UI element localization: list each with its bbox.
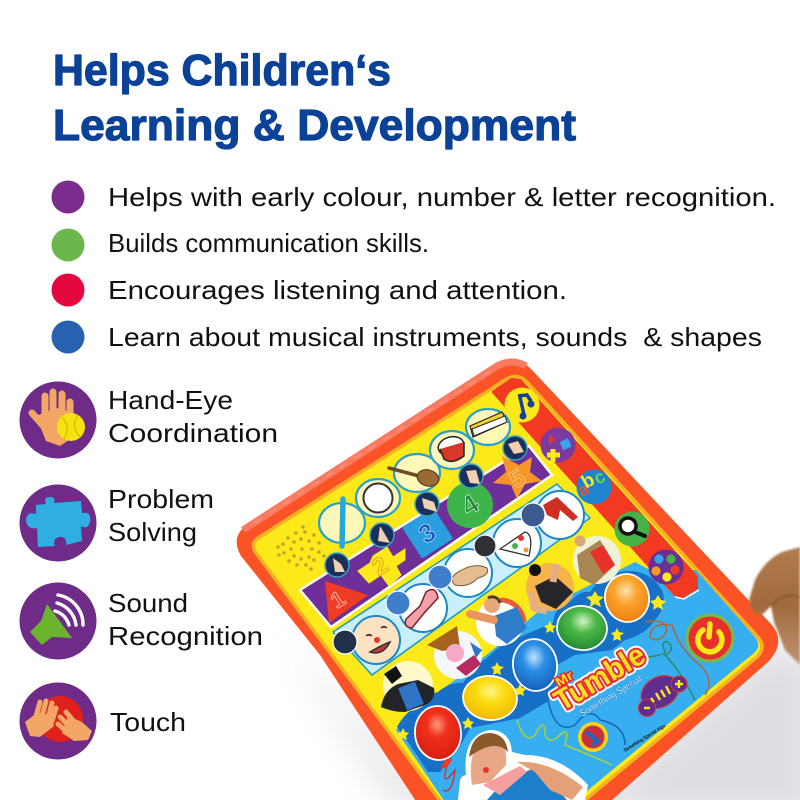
button: music — [504, 388, 540, 422]
product: sound tablet — [237, 361, 800, 800]
instrument: tambourine — [356, 479, 400, 517]
label: hand-eye coordination: Hand-Eye — [108, 385, 233, 415]
shape: plus 2: 2 — [367, 551, 393, 581]
button: colours — [648, 550, 684, 584]
volume control — [635, 669, 687, 716]
icon: hands on red circle — [20, 682, 96, 760]
logo: Mr Tumble Something Special: Something Special — [578, 673, 644, 720]
character: pirate — [526, 563, 574, 611]
label: touch: Touch — [110, 707, 186, 737]
hand button 1 — [325, 553, 349, 577]
character circles — [381, 536, 621, 712]
skill: sound recognition — [20, 582, 263, 660]
dark blue cloud — [397, 571, 664, 772]
hand button 3 — [415, 492, 439, 516]
shape: circle 4 — [447, 482, 493, 528]
word: palette — [493, 519, 541, 567]
bullet list — [52, 180, 776, 354]
bullet: listening: Encourages listening and attention. — [108, 275, 567, 305]
red button strip — [494, 380, 699, 599]
button: numbers — [540, 428, 576, 462]
shape: square 3 — [402, 508, 453, 559]
instrument: guitar — [389, 454, 441, 492]
instrument circles — [319, 409, 510, 546]
balloon: yellow — [461, 674, 519, 722]
bullet: instruments: Learn about musical instruments, sounds & shapes — [108, 322, 762, 352]
icon: speaker — [20, 582, 96, 660]
balloon: orange — [601, 571, 653, 625]
balloons — [413, 571, 653, 769]
word: hand — [444, 549, 492, 597]
character: clown in shirt — [470, 597, 527, 646]
button: letters: a — [574, 479, 593, 500]
logo: Mr Tumble Something Special: Tumble — [549, 638, 651, 718]
hand holding tablet — [749, 547, 800, 665]
skill: problem solving — [20, 484, 214, 562]
balloon: blue — [510, 636, 560, 694]
shape: square 3: 3 — [413, 516, 441, 550]
word: dice — [536, 491, 584, 539]
purple shapes strip — [300, 446, 552, 627]
presenter photo — [458, 730, 588, 800]
character: fairy — [427, 626, 482, 679]
shape: star 5: 5 — [504, 463, 531, 494]
tablet casing — [237, 361, 778, 800]
hand buttons — [325, 436, 527, 577]
hand button 5 — [503, 436, 527, 460]
button: letters: b — [578, 469, 599, 493]
button: letters: c — [590, 466, 609, 488]
balloon: green — [554, 603, 610, 653]
logo: Mr Tumble Something Special: Tumble — [549, 638, 651, 718]
shape: triangle 1 — [325, 581, 368, 623]
title: Helps Children‘s — [53, 46, 391, 95]
instrument: drum — [430, 431, 474, 469]
balloon panel — [396, 562, 758, 800]
skill: touch — [20, 682, 186, 760]
balloon strings — [443, 621, 709, 791]
button: letters — [574, 466, 612, 504]
button: question magnifier — [614, 512, 650, 546]
word: face — [352, 616, 400, 664]
apple sticker — [578, 722, 608, 752]
bullet: communication: Builds communication skills. — [108, 228, 429, 258]
balloon: red — [413, 704, 463, 769]
label: problem solving: Problem — [108, 484, 214, 514]
logo: Mr Tumble Something Special: Mr — [553, 668, 576, 690]
label: hand-eye coordination: Coordination — [108, 418, 278, 448]
shape: triangle 1: 1 — [326, 586, 350, 613]
label: problem solving: Solving — [108, 517, 197, 547]
light blue word strip — [333, 484, 590, 675]
instrument: keyboard — [466, 409, 510, 445]
icon: hand and ball — [20, 382, 96, 458]
icon: puzzle piece — [20, 484, 96, 562]
title: Learning & Development — [53, 101, 576, 150]
word: bow tie — [399, 584, 447, 632]
title — [53, 46, 576, 150]
bullet: colour recognition: Helps with early colour, number & letter recognition. — [108, 182, 776, 212]
small print: Something Special logo — [623, 723, 667, 754]
label: sound recognition: Recognition — [108, 621, 263, 651]
instrument: recorder — [319, 499, 365, 546]
character: red coat — [573, 536, 621, 585]
shape: circle 4: 4 — [456, 488, 484, 522]
balloon stars — [397, 591, 666, 740]
power button — [687, 615, 733, 661]
label: hand-eye coordination — [108, 385, 278, 448]
shape: plus 2 — [358, 547, 405, 586]
character: magician — [381, 661, 434, 712]
hand button 4 — [459, 464, 483, 488]
signer thumbnails — [333, 503, 545, 654]
label: sound recognition: Sound — [108, 588, 188, 618]
skill: hand-eye coordination — [20, 382, 278, 458]
hand button 2 — [370, 523, 394, 547]
shape: star 5 — [493, 456, 542, 499]
label: problem solving — [108, 484, 214, 547]
label: sound recognition — [108, 588, 263, 651]
tablet shadow — [290, 640, 800, 800]
tablet face — [253, 376, 762, 800]
speaker grille — [276, 525, 326, 571]
